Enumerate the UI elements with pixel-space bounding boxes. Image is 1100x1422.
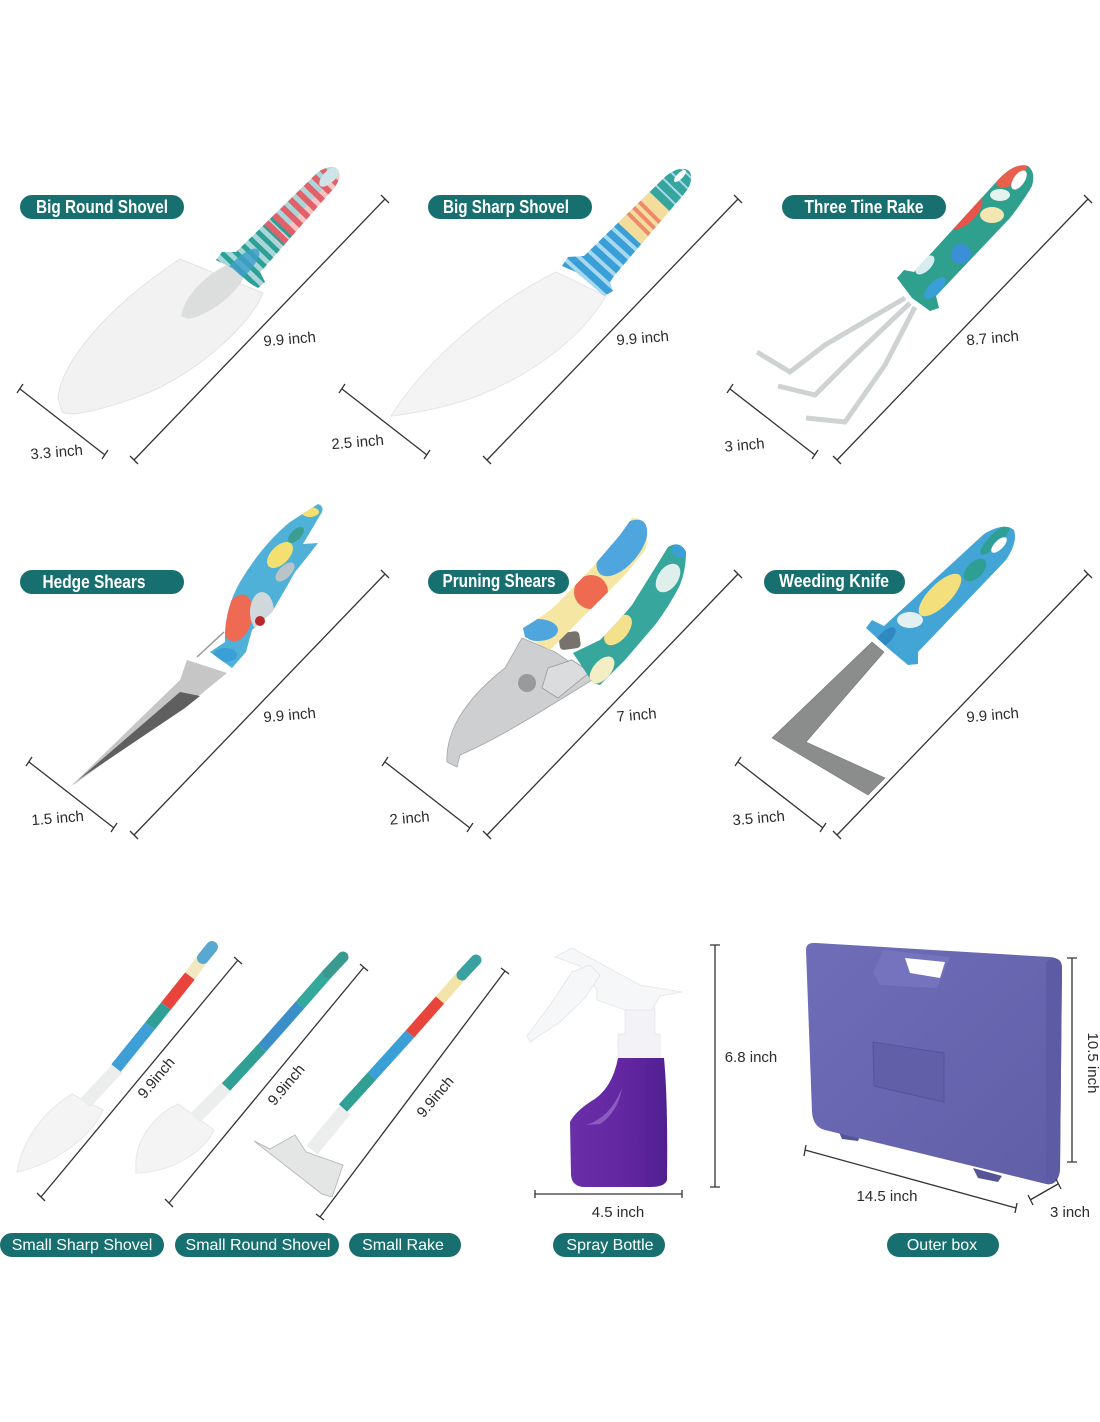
tool: small rake xyxy=(254,960,476,1197)
blade xyxy=(447,638,592,767)
dimension: 3 inch xyxy=(724,384,818,459)
handle xyxy=(866,526,1015,665)
dimension: 4.5 inch xyxy=(535,1190,682,1221)
pivot plate xyxy=(542,660,590,698)
dimension: 9.9inch xyxy=(165,964,368,1207)
label: Outer box: Outer box xyxy=(907,1237,977,1254)
spring wire xyxy=(197,632,224,657)
label: Small Sharp Shovel xyxy=(0,1233,164,1257)
handle: upper xyxy=(523,518,648,650)
label: Three Tine Rake: Three Tine Rake xyxy=(804,197,924,217)
label: Small Rake: Small Rake xyxy=(362,1237,444,1254)
dimension: 3.5 inch xyxy=(732,757,826,832)
dimension: 9.9inch: 9.9inch xyxy=(134,1054,179,1102)
dimension: 9.9 inch: 9.9 inch xyxy=(966,705,1020,726)
label: Big Sharp Shovel: Big Sharp Shovel xyxy=(443,197,569,217)
dimension: 8.7 inch xyxy=(833,195,1092,464)
blade xyxy=(17,1094,103,1172)
trigger xyxy=(527,965,600,1042)
label recess xyxy=(873,1042,944,1102)
neck xyxy=(312,1110,345,1150)
label: Hedge Shears: Hedge Shears xyxy=(42,572,146,592)
dimension: 9.9 inch: 9.9 inch xyxy=(616,328,670,349)
tines xyxy=(757,298,915,422)
blade xyxy=(72,660,227,785)
dimension: 7 inch: 7 inch xyxy=(616,705,657,726)
dimension: 14.5 inch: 14.5 inch xyxy=(857,1188,917,1205)
handle recess xyxy=(873,950,950,988)
neck xyxy=(195,1085,228,1118)
spray bottle xyxy=(527,948,682,1187)
label: Small Round Shovel: Small Round Shovel xyxy=(186,1237,330,1254)
dimension: 9.9 inch xyxy=(130,570,389,839)
label: Outer box xyxy=(887,1233,999,1257)
dimension: 3.3 inch xyxy=(17,384,108,463)
dimension: 2.5 inch: 2.5 inch xyxy=(331,432,385,453)
dimension: 9.9inch xyxy=(316,968,509,1220)
neck and collar xyxy=(618,1008,660,1060)
dimension: 2.5 inch xyxy=(331,384,430,459)
tool: hedge shears xyxy=(72,500,325,785)
case body xyxy=(806,943,1062,1184)
tool: weeding knife xyxy=(772,520,1025,795)
blade xyxy=(136,1104,214,1173)
red bolt xyxy=(255,616,265,626)
dimension: 4.5 inch: 4.5 inch xyxy=(592,1204,644,1221)
dimension: 9.9inch xyxy=(37,957,242,1201)
handle hole xyxy=(989,535,1009,555)
neck xyxy=(85,1068,118,1103)
dimension: 14.5 inch xyxy=(804,1145,1017,1213)
label: Hedge Shears xyxy=(20,570,184,594)
dimension: 6.8 inch: 6.8 inch xyxy=(725,1049,777,1066)
tool: big sharp shovel xyxy=(391,160,700,416)
dimension: 8.7 inch: 8.7 inch xyxy=(966,328,1020,349)
label: Small Rake xyxy=(349,1233,461,1257)
label: Big Round Shovel: Big Round Shovel xyxy=(36,197,168,217)
neck xyxy=(181,262,245,319)
dimension: 6.8 inch xyxy=(710,945,777,1187)
dimension: 3.3 inch: 3.3 inch xyxy=(30,442,84,463)
handle xyxy=(562,168,692,296)
handle xyxy=(116,1026,150,1068)
dimension: 9.9inch: 9.9inch xyxy=(413,1073,458,1121)
tool: three tine rake xyxy=(757,151,1040,422)
dimension: 9.9 inch xyxy=(833,570,1092,839)
head xyxy=(254,1135,343,1197)
dimension: 9.9 inch xyxy=(130,195,389,464)
label: Spray Bottle xyxy=(553,1233,665,1257)
handle xyxy=(343,1076,372,1108)
dimension: 3 inch: 3 inch xyxy=(1050,1204,1090,1221)
handle hole xyxy=(1008,168,1030,192)
bolt xyxy=(518,674,536,692)
dimension: 9.9inch: 9.9inch xyxy=(264,1061,309,1109)
spring xyxy=(558,631,581,650)
label: Weeding Knife: Weeding Knife xyxy=(779,571,889,591)
blade xyxy=(58,259,263,414)
dimension: 1.5 inch: 1.5 inch xyxy=(31,808,85,829)
blade xyxy=(772,642,885,795)
side band xyxy=(1046,958,1062,1184)
dimension: 2 inch xyxy=(382,757,473,832)
outer box xyxy=(806,943,1062,1184)
handle xyxy=(210,504,322,668)
head xyxy=(555,948,682,1010)
dimension: 9.9 inch: 9.9 inch xyxy=(263,705,317,726)
label: Small Round Shovel xyxy=(175,1233,339,1257)
dimension: 3 inch xyxy=(1028,1179,1090,1221)
dimension: 9.9 inch: 9.9 inch xyxy=(263,329,317,350)
bottle body xyxy=(570,1058,667,1187)
blade xyxy=(391,272,606,416)
handle xyxy=(216,167,340,288)
dimension: 3.5 inch: 3.5 inch xyxy=(732,808,786,829)
dimension: 2 inch: 2 inch xyxy=(389,808,430,829)
tool: big round shovel xyxy=(58,160,360,414)
handle xyxy=(897,165,1034,311)
dimension: 9.9 inch xyxy=(483,195,742,464)
tool: pruning shears xyxy=(447,511,692,767)
label: Pruning Shears: Pruning Shears xyxy=(442,571,556,591)
feet xyxy=(838,1130,1002,1182)
tool: small sharp shovel xyxy=(17,947,212,1172)
dimension: 10.5 inch xyxy=(1067,958,1100,1162)
label: Spray Bottle: Spray Bottle xyxy=(566,1237,654,1254)
tool: small round shovel xyxy=(136,957,343,1173)
label: Small Sharp Shovel: Small Sharp Shovel xyxy=(12,1237,152,1254)
bottle highlight xyxy=(586,1088,622,1125)
handle opening xyxy=(905,958,945,978)
dimension: 7 inch xyxy=(483,570,742,839)
handle: lower xyxy=(573,544,686,685)
dimension: 3 inch: 3 inch xyxy=(724,435,765,456)
dimension: 1.5 inch xyxy=(26,757,117,832)
handle xyxy=(226,1048,262,1087)
